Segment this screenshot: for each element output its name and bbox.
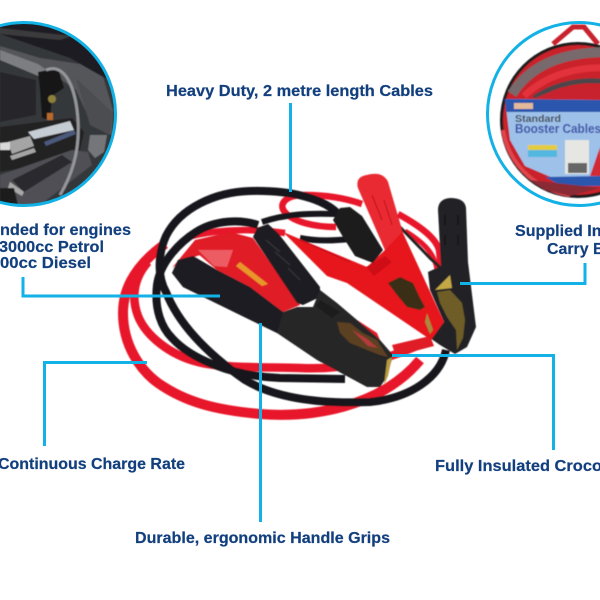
second black handle behind the red clip	[333, 207, 383, 263]
label: engines	[0, 222, 131, 272]
photo: carry bag circle	[488, 22, 600, 206]
red insulator under black clips	[172, 232, 434, 356]
booster cables product photo	[123, 174, 476, 415]
black cables	[156, 191, 446, 402]
bag label text: Standard	[515, 114, 561, 125]
callout line: crocodile clips	[392, 356, 554, 450]
left black clip	[172, 256, 393, 387]
label: carry bag	[515, 223, 600, 258]
callout line: handle grips	[259, 323, 262, 522]
label: engines: 3000cc Petrol	[0, 239, 104, 256]
photo: engine bay circle	[0, 20, 120, 210]
label: engines: 00cc Diesel	[0, 255, 91, 272]
red crocodile clip	[283, 174, 444, 340]
callout line: carry bag	[460, 263, 585, 284]
label: engines: nded for engines	[0, 222, 131, 239]
label: heavy duty cables: Heavy Duty, 2 metre length Cables	[166, 83, 433, 100]
label: handle grips: Durable, ergonomic Handle Grips	[135, 530, 390, 547]
label: charge rate: Continuous Charge Rate	[0, 456, 185, 473]
red cables	[123, 195, 441, 415]
middle black clip handle	[253, 224, 320, 305]
callout line: heavy duty cables	[289, 103, 292, 192]
callout line: engines	[23, 277, 220, 296]
right black clip	[428, 198, 476, 354]
callout line: charge rate	[44, 362, 147, 446]
